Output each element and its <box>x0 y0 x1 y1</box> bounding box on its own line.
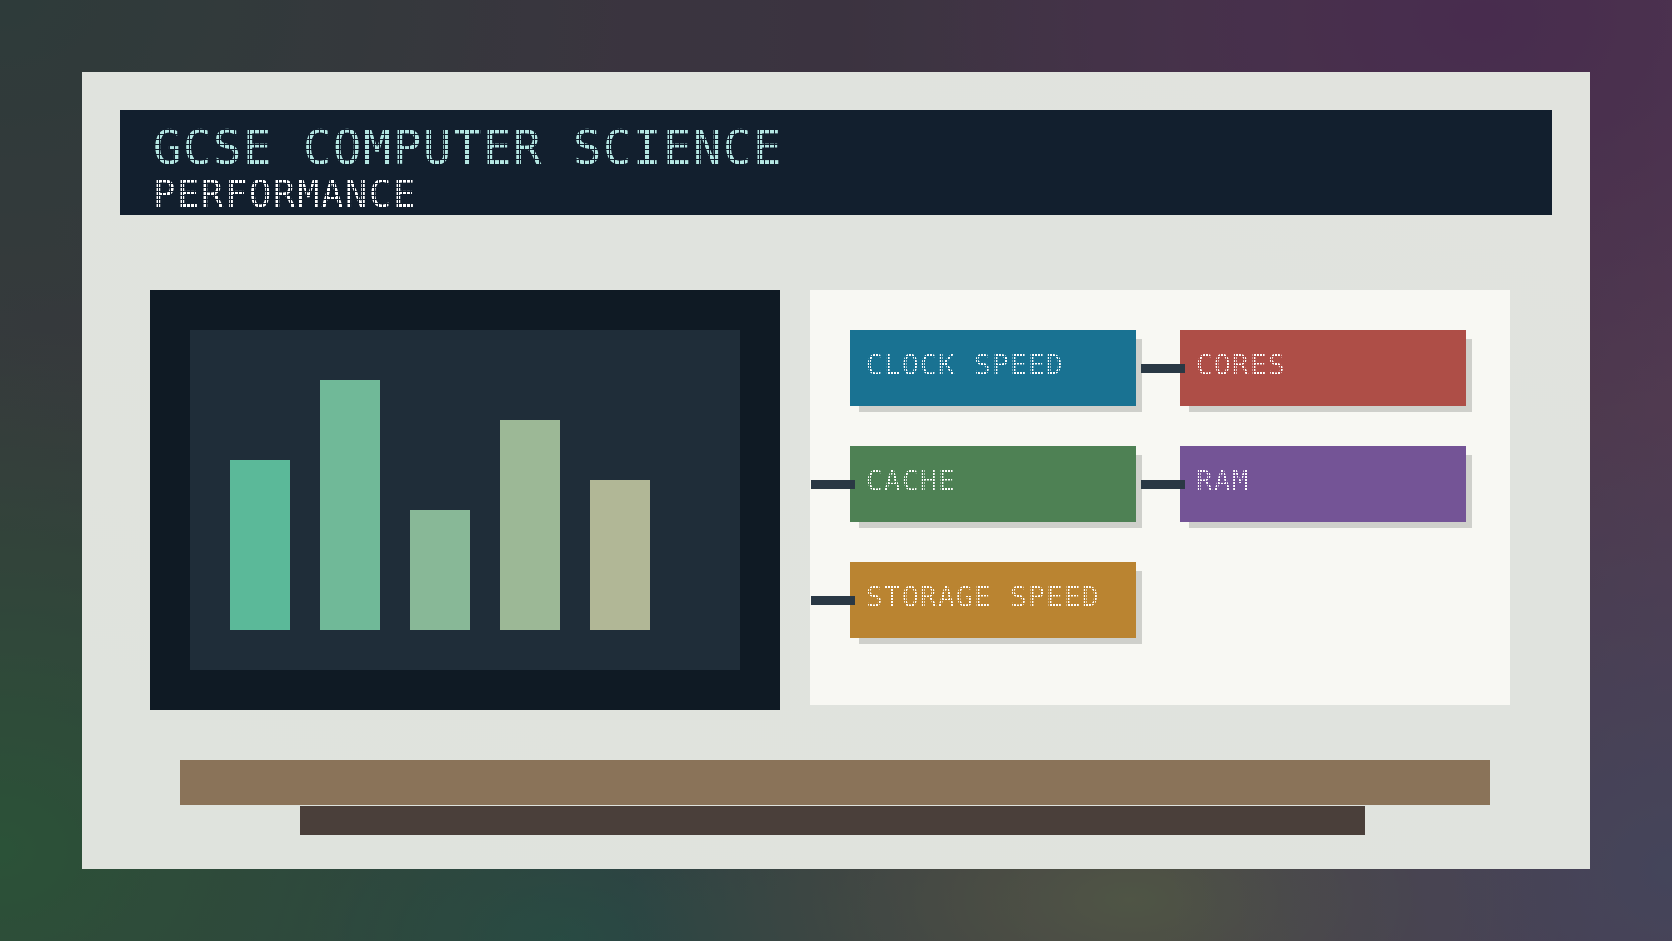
bar 4 <box>500 420 560 630</box>
bar 1 <box>230 460 290 630</box>
box: storage speed: STORAGE SPEED <box>866 581 1099 613</box>
connector: clock speed to cores <box>1141 364 1185 373</box>
bar 2 <box>320 380 380 630</box>
box: cores: CORES <box>1196 349 1285 381</box>
subtitle: PERFORMANCE <box>153 173 415 216</box>
box: cache: CACHE <box>866 465 955 497</box>
box: cache <box>850 446 1142 528</box>
main panel <box>82 72 1590 869</box>
box: cores <box>1180 330 1472 412</box>
box: clock speed: CLOCK SPEED <box>866 349 1063 381</box>
header bar <box>120 110 1552 216</box>
stand bar <box>300 806 1365 835</box>
title: GCSE COMPUTER SCIENCE <box>153 121 781 176</box>
box: storage speed <box>850 562 1142 644</box>
base bar <box>180 760 1490 805</box>
bar 3 <box>410 510 470 630</box>
box: ram <box>1180 446 1472 528</box>
box: ram: RAM <box>1196 465 1249 497</box>
connector: cache left <box>811 480 855 489</box>
chart panel <box>150 290 780 710</box>
connector: cache to ram <box>1141 480 1185 489</box>
box: clock speed <box>850 330 1142 412</box>
bar 5 <box>590 480 650 630</box>
connector: storage speed left <box>811 596 855 605</box>
factors panel <box>810 290 1510 705</box>
